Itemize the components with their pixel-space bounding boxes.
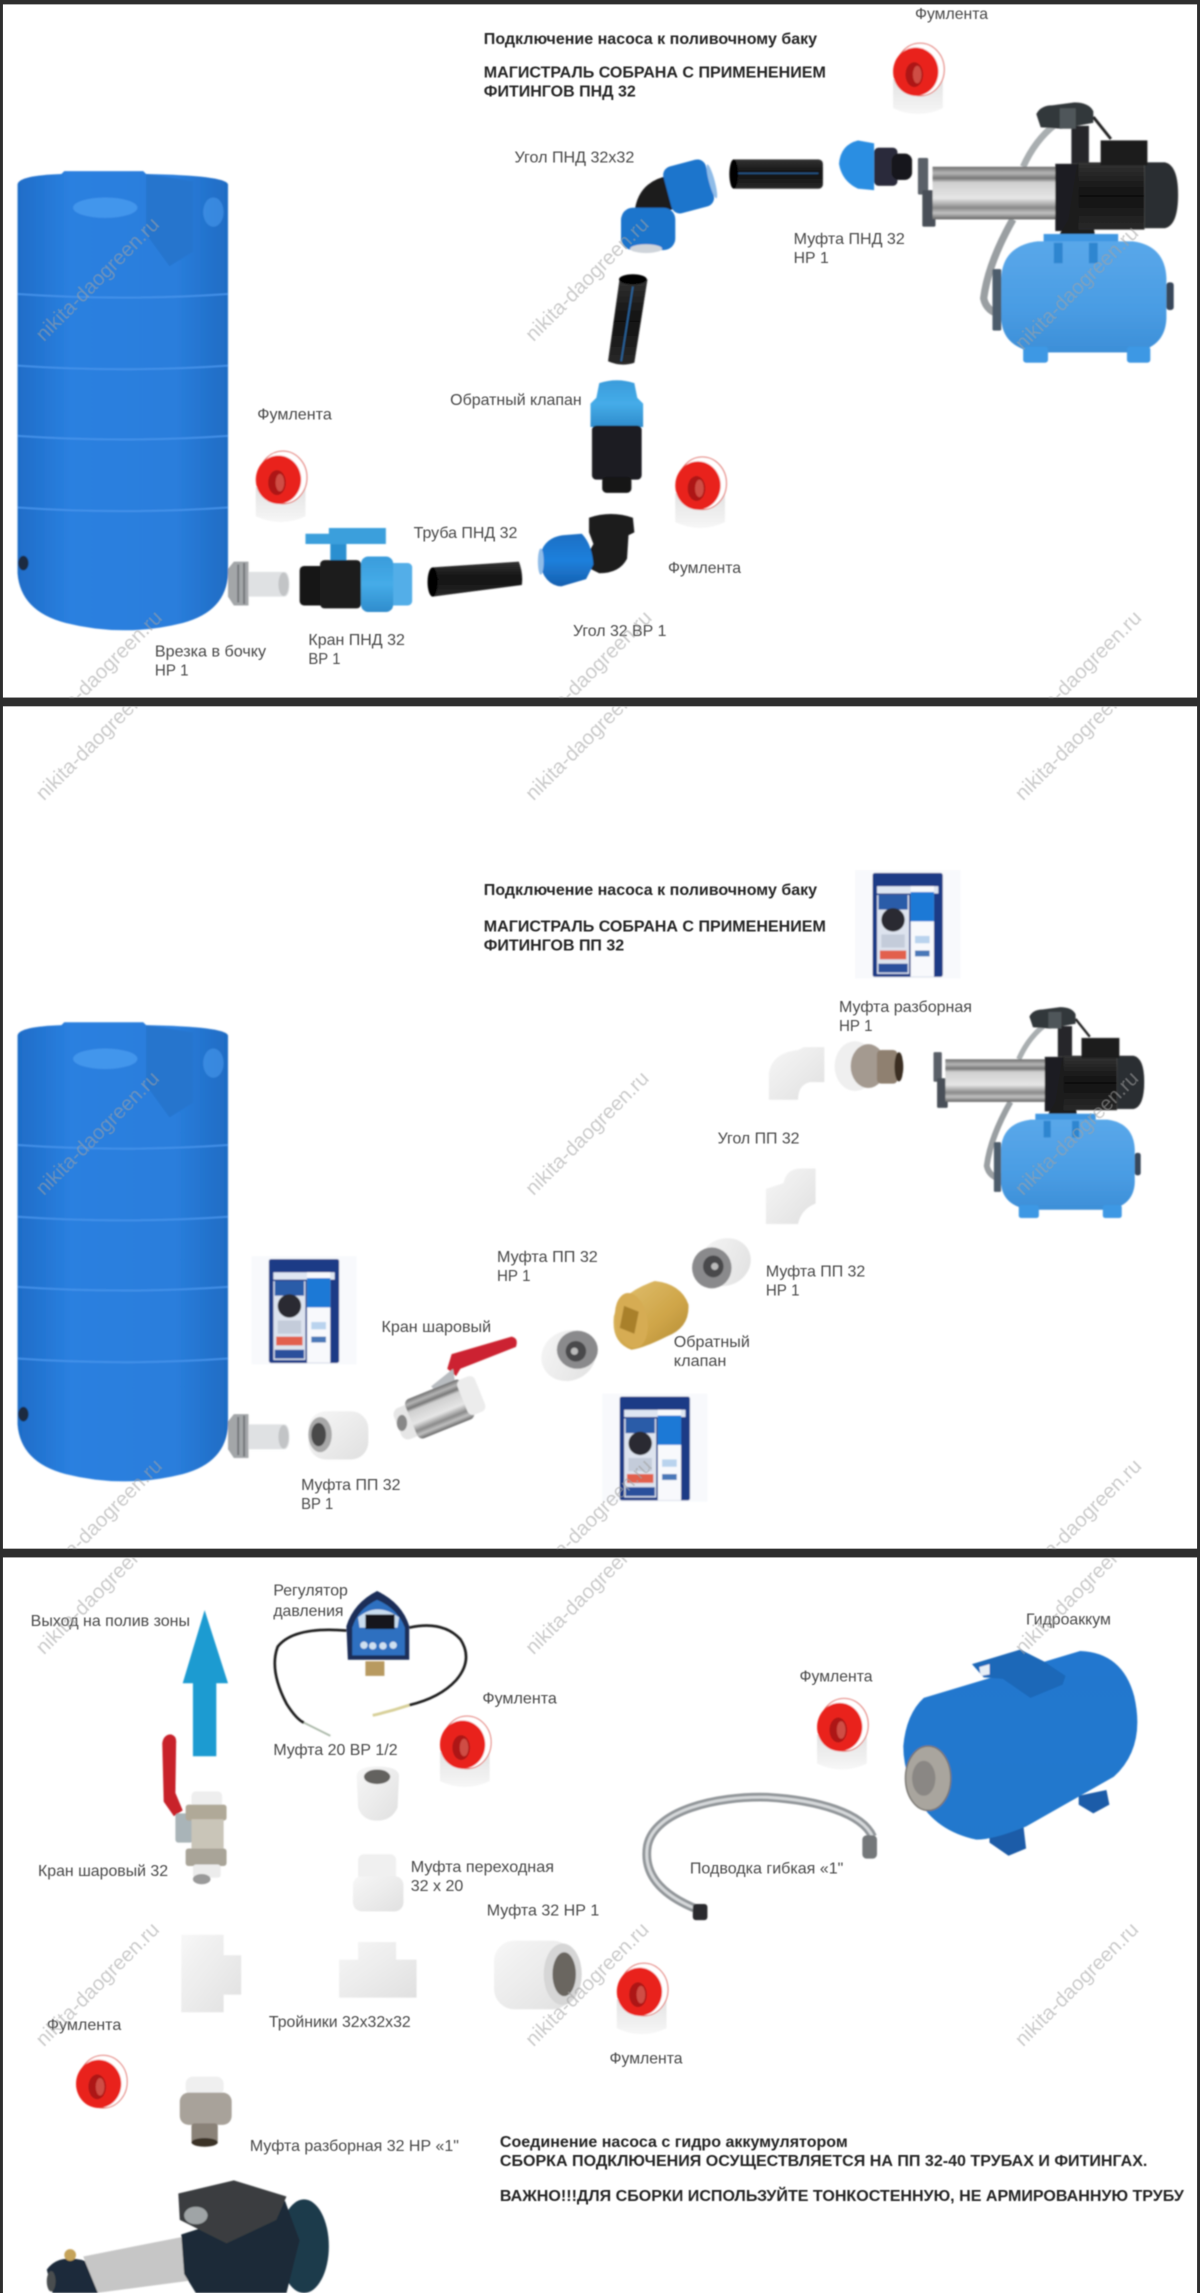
- labels panel 3: Муфта 20 ВР 1/2: [273, 1741, 398, 1759]
- labels panel 2: НР 1: [497, 1267, 531, 1285]
- watermarks: nikita-daogreen.ru: [34, 1454, 167, 1587]
- icon: union: [835, 1041, 903, 1091]
- panel: ПНД 32 assembly: [18, 5, 1178, 680]
- labels panel 1: ФИТИНГОВ ПНД 32: [484, 83, 636, 101]
- labels panel 1: Обратный клапан: [450, 391, 582, 409]
- icon: sealant pack: [855, 870, 960, 978]
- icon: pump station: [934, 1007, 1144, 1218]
- icon: flexible hose: [647, 1797, 877, 1920]
- labels panel 3: [31, 1581, 1185, 2205]
- watermarks: nikita-daogreen.ru: [521, 672, 654, 805]
- labels panel 1: Угол 32 ВР 1: [573, 622, 667, 640]
- icon: tee horizontal: [339, 1942, 417, 1998]
- icon: ball valve ПНД: [300, 528, 412, 612]
- labels panel 2: Муфта ПП 32: [766, 1263, 865, 1281]
- labels panel 1: НР 1: [155, 662, 189, 680]
- labels panel 1: Фумлента: [668, 559, 741, 577]
- labels panel 3: СБОРКА ПОДКЛЮЧЕНИЯ ОСУЩЕСТВЛЯЕТСЯ НА ПП 32-40 ТРУБАХ И ФИТИНГАХ.: [500, 2152, 1147, 2170]
- icon: elbow 32 ВР: [538, 514, 634, 586]
- icon: sealant pack: [251, 1256, 357, 1364]
- labels panel 1: ВР 1: [308, 650, 341, 668]
- icon: pump: [47, 2180, 329, 2293]
- icon: tape: [893, 43, 944, 114]
- icon: horizontal pipe: [729, 159, 823, 189]
- labels panel 2: НР 1: [839, 1017, 873, 1035]
- icon: ball valve: [390, 1337, 517, 1446]
- watermarks: nikita-daogreen.ru: [1010, 1918, 1143, 2051]
- icon: tape: [76, 2055, 127, 2108]
- icon: elbow ПНД 32x32: [621, 157, 719, 253]
- icon: fitting: [533, 1321, 604, 1390]
- labels panel 3: Соединение насоса с гидро аккумулятором: [500, 2133, 848, 2151]
- icon: pressure regulator: [275, 1591, 466, 1736]
- labels panel 3: Фумлента: [47, 2016, 121, 2034]
- labels panel 3: Фумлента: [610, 2049, 683, 2067]
- labels panel 2: Муфта ПП 32: [301, 1476, 401, 1494]
- labels panel 3: давления: [273, 1602, 343, 1620]
- panel: pump to accumulator assembly: [31, 1581, 1185, 2293]
- icon: fitting: [691, 1230, 759, 1294]
- icon: tape: [256, 451, 307, 522]
- watermarks: nikita-daogreen.ru: [34, 606, 167, 739]
- labels panel 3: ВАЖНО!!!ДЛЯ СБОРКИ ИСПОЛЬЗУЙТЕ ТОНКОСТЕННУЮ, НЕ АРМИРОВАННУЮ ТРУБУ: [500, 2186, 1185, 2205]
- labels panel 3: Выход на полив зоны: [31, 1612, 190, 1630]
- icon: vertical ball valve: [162, 1734, 227, 1884]
- icon: sealant pack: [602, 1394, 707, 1502]
- labels panel 2: Муфта ПП 32: [497, 1248, 598, 1266]
- labels panel 2: клапан: [674, 1352, 726, 1370]
- labels panel 3: Фумлента: [482, 1690, 557, 1708]
- watermarks: nikita-daogreen.ru: [1013, 606, 1146, 739]
- watermarks: nikita-daogreen.ru: [31, 213, 164, 346]
- panel: ПП 32 assembly: [18, 870, 1144, 1513]
- icon: union vertical: [180, 2077, 232, 2147]
- labels panel 1: Фумлента: [915, 5, 988, 23]
- labels panel 3: 32 х 20: [411, 1877, 463, 1895]
- icon: pipe: [428, 562, 522, 597]
- labels panel 1: Угол ПНД 32х32: [514, 148, 634, 166]
- icon: coupling 32: [494, 1941, 582, 2009]
- watermarks: nikita-daogreen.ru: [1013, 1454, 1146, 1587]
- labels panel 2: ФИТИНГОВ ПП 32: [484, 937, 624, 955]
- watermarks: nikita-daogreen.ru: [524, 606, 657, 739]
- labels panel 2: МАГИСТРАЛЬ СОБРАНА С ПРИМЕНЕНИЕМ: [484, 918, 826, 936]
- icon: upper elbow ПП: [769, 1047, 824, 1100]
- labels panel 2: Подключение насоса к поливочному баку: [484, 881, 817, 899]
- labels panel 1: Кран ПНД 32: [308, 631, 405, 649]
- watermarks: nikita-daogreen.ru: [31, 1918, 164, 2051]
- icon: tank bulkhead fitting: [228, 562, 289, 605]
- watermarks: nikita-daogreen.ru: [31, 672, 164, 805]
- watermarks: nikita-daogreen.ru: [1010, 672, 1143, 805]
- arrow: outlet to irrigation zone: [183, 1610, 228, 1756]
- icon: tee vertical: [181, 1935, 241, 2012]
- labels panel 3: Подводка гибкая «1": [690, 1859, 844, 1877]
- watermarks: nikita-daogreen.ru: [1010, 1067, 1143, 1200]
- labels panel 3: Муфта переходная: [411, 1858, 554, 1876]
- labels panel 3: Гидроаккум: [1026, 1611, 1111, 1629]
- labels panel 2: Угол ПП 32: [718, 1130, 800, 1148]
- watermarks: nikita-daogreen.ru: [524, 1454, 657, 1587]
- watermarks: nikita-daogreen.ru: [1010, 222, 1143, 355]
- icon: tape: [617, 1963, 668, 2034]
- labels panel 2: Обратный: [674, 1333, 750, 1351]
- labels panel 3: Тройники 32х32х32: [269, 2013, 411, 2031]
- watermarks: nikita-daogreen.ru: [521, 213, 654, 346]
- labels panel 1: Муфта ПНД 32: [794, 230, 905, 248]
- labels panel 1: МАГИСТРАЛЬ СОБРАНА С ПРИМЕНЕНИЕМ: [484, 64, 826, 82]
- watermarks: nikita-daogreen.ru: [521, 1526, 654, 1659]
- icon: tank: [18, 171, 228, 630]
- labels panel 3: Фумлента: [800, 1668, 873, 1686]
- icon: tank bulkhead fitting: [228, 1414, 289, 1458]
- icon: check valve: [590, 380, 643, 493]
- watermarks: nikita-daogreen.ru: [521, 1918, 654, 2051]
- labels panel 2: Муфта разборная: [839, 998, 972, 1016]
- watermarks: nikita-daogreen.ru: [1010, 1526, 1143, 1659]
- icon: lower elbow ПП: [766, 1168, 816, 1224]
- icon: tape: [817, 1699, 868, 1769]
- icon: reducer coupling: [353, 1854, 403, 1911]
- labels panel 3: Регулятор: [273, 1581, 348, 1599]
- icon: accumulator: [903, 1650, 1137, 1856]
- labels panel 3: Муфта 32 НР 1: [487, 1902, 599, 1920]
- labels panel 2: ВР 1: [301, 1495, 333, 1513]
- watermarks: [31, 213, 1146, 2051]
- icon: pump station: [918, 102, 1178, 363]
- labels panel 1: [155, 5, 988, 680]
- labels panel 1: НР 1: [794, 249, 829, 267]
- labels panel 1: Врезка в бочку: [155, 643, 266, 661]
- labels panel 1: Труба ПНД 32: [414, 524, 517, 542]
- icon: coupling 20: [357, 1767, 399, 1821]
- labels panel 1: Подключение насоса к поливочному баку: [484, 30, 817, 48]
- icon: brass check valve: [611, 1281, 689, 1351]
- labels panel 2: [301, 881, 972, 1513]
- labels panel 3: Кран шаровый 32: [38, 1862, 168, 1880]
- icon: tape: [675, 457, 726, 528]
- watermarks: nikita-daogreen.ru: [31, 1067, 164, 1200]
- watermarks: nikita-daogreen.ru: [31, 1526, 164, 1659]
- icon: coupling ПНД: [839, 140, 912, 190]
- labels panel 1: Фумлента: [257, 406, 332, 424]
- icon: vertical pipe: [608, 274, 648, 365]
- icon: coupling ПП ВР: [308, 1411, 368, 1459]
- icon: tape: [440, 1716, 491, 1787]
- labels panel 2: Кран шаровый: [381, 1318, 491, 1336]
- labels panel 3: Муфта разборная 32 НР «1": [250, 2137, 459, 2155]
- icon: tank: [18, 1022, 228, 1481]
- labels panel 2: НР 1: [766, 1282, 800, 1300]
- watermarks: nikita-daogreen.ru: [521, 1067, 654, 1200]
